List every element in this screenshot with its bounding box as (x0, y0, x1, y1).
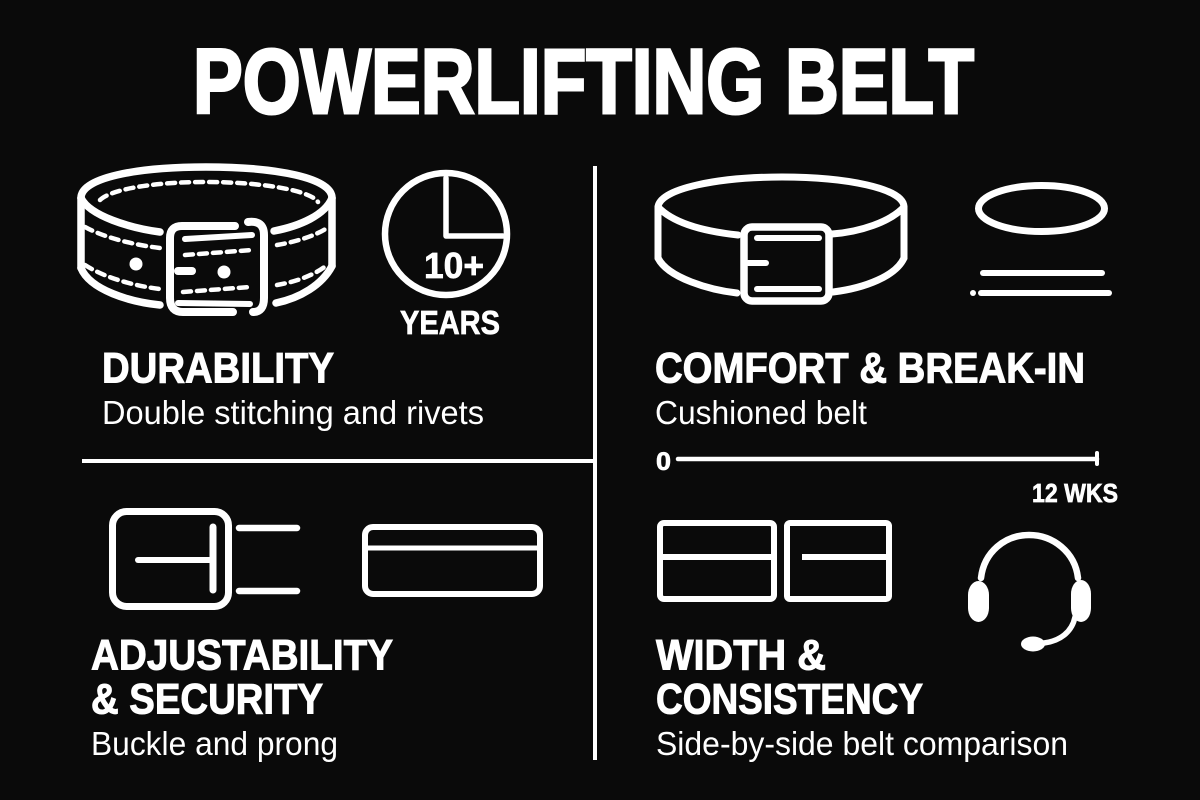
title: POWERLIFTING BELT (193, 31, 974, 133)
text: adjustability description: Buckle and prong (91, 725, 338, 762)
panel: comfort and break-in (655, 177, 1118, 508)
heading: adjustability and security (91, 632, 393, 724)
heading: durability: DURABILITY (102, 344, 334, 392)
text: comfort description: Cushioned belt (655, 394, 867, 431)
heading: adjustability and security: ADJUSTABILITY (91, 632, 393, 680)
icon: belt cushion cross-section (970, 186, 1109, 296)
chart: break-in timeline: 0 (656, 448, 671, 476)
heading: width and consistency (656, 632, 923, 724)
heading: width and consistency: WIDTH & (656, 632, 826, 680)
text: width description: Side-by-side belt comparison (656, 725, 1068, 762)
icon: belt strap (365, 527, 540, 594)
panel: adjustability and security (91, 512, 540, 762)
heading: width and consistency: CONSISTENCY (656, 676, 923, 724)
icon: clock 10+ years (385, 173, 507, 341)
icon: plain belt with buckle (658, 177, 904, 301)
icon: clock 10+ years: 10+ (424, 245, 484, 286)
text: durability description: Double stitching and rivets (102, 394, 484, 431)
panel: durability (81, 167, 507, 431)
icon: buckle and prong (112, 512, 297, 606)
panel: width and consistency (656, 523, 1091, 762)
icon: headset (968, 535, 1091, 652)
icon: stitched belt with buckle (81, 167, 332, 312)
heading: comfort and break-in: COMFORT & BREAK-IN (655, 344, 1085, 392)
chart: break-in timeline (656, 448, 1118, 508)
icon: clock 10+ years: YEARS (400, 304, 500, 341)
chart: break-in timeline: 12 WKS (1032, 478, 1118, 508)
heading: adjustability and security: & SECURITY (91, 676, 323, 724)
icon: side-by-side belts (660, 523, 889, 599)
